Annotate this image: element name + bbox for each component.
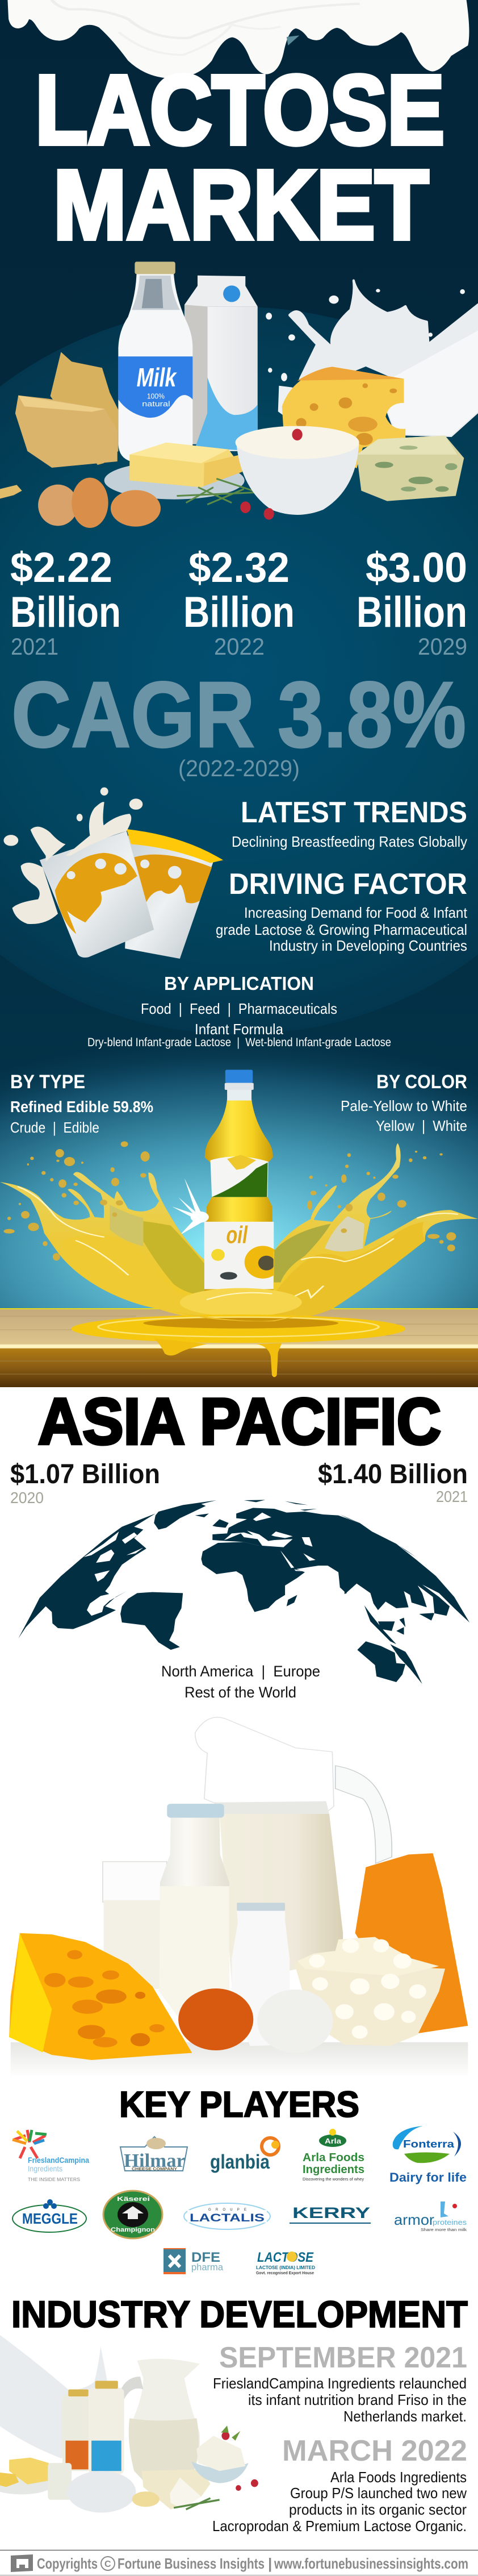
logo: Arla: Discovering the wonders of whey — [303, 2178, 364, 2182]
regional values: $1.07 Billion — [10, 1459, 160, 1489]
logo: Käserei Champignon: Champignon — [111, 2227, 155, 2233]
logo: glanbia: glanbia — [210, 2151, 270, 2173]
market size stats: $2.22 — [10, 544, 112, 591]
logo: DFE Pharma: DFE — [191, 2250, 220, 2265]
eurasia — [212, 1508, 469, 1622]
orange cheese — [355, 1853, 468, 2033]
logo: Fonterra — [389, 2126, 467, 2184]
glass — [48, 2463, 72, 2500]
logo: Arla: Ingredients — [303, 2163, 364, 2176]
logo: Lactalis — [184, 2203, 270, 2229]
glass of milk — [103, 1862, 167, 1989]
logo: Lactalis: GROUPE — [208, 2208, 246, 2212]
logo: Hilmar — [120, 2137, 187, 2171]
bowl of cottage cheese — [236, 426, 359, 519]
bottles — [62, 2381, 124, 2474]
dark header background — [0, 0, 478, 1466]
tall bottle — [159, 1804, 229, 2020]
logo: Käserei Champignon — [103, 2191, 162, 2238]
footer: | — [268, 2555, 272, 2572]
small bottle — [232, 1903, 290, 2046]
title: MARKET — [53, 149, 429, 260]
logo: Fonterra: Dairy for life — [389, 2170, 467, 2184]
oil bottle: oil — [226, 1221, 248, 1249]
milk bottle — [118, 262, 192, 461]
logo: Lactose India: LACTOSE — [257, 2250, 314, 2265]
logo: Käserei Champignon: Käserei — [117, 2196, 150, 2203]
market size stats: $3.00 — [366, 544, 467, 591]
driving factor: DRIVING FACTOR — [229, 868, 467, 901]
other regions: North America | Europe — [161, 1663, 320, 1680]
oil droplets — [3, 1141, 456, 1260]
other regions — [161, 1663, 320, 1701]
icon: Fortune Business Insights logo — [11, 2554, 33, 2572]
illustration: yogurt cups — [3, 788, 223, 959]
update: March 2022: MARCH 2022 — [282, 2434, 467, 2467]
market size stats: 2021 — [11, 633, 58, 660]
regional values — [10, 1459, 468, 1507]
market size stats: Billion — [10, 588, 121, 636]
logo: glanbia — [210, 2138, 279, 2173]
latest trends — [232, 796, 467, 850]
market size stats: Billion — [183, 588, 295, 636]
logo: Lactose India: LACTOSE (INDIA) LIMITED — [256, 2265, 315, 2270]
eggs — [38, 478, 161, 528]
milk bottle: 100% — [147, 392, 165, 401]
by application: BY APPLICATION — [164, 973, 314, 994]
logo: FrieslandCampina — [12, 2130, 89, 2182]
seas — [224, 1513, 316, 1571]
world map — [11, 1500, 469, 1684]
oil drips — [154, 1338, 282, 1377]
back cup — [125, 835, 213, 959]
butter on plate — [104, 443, 245, 500]
latest trends: LATEST TRENDS — [241, 796, 467, 829]
milk bottle: natural — [142, 399, 170, 408]
by application — [87, 973, 391, 1049]
logo: Lactose India: Govt. recognised Export House — [256, 2271, 314, 2275]
back faces — [131, 1220, 204, 1296]
front cup — [40, 831, 154, 958]
logo: Armor Proteines: armor — [394, 2211, 434, 2228]
milk drip along the top edge — [7, 0, 469, 78]
logo: Hilmar: CHEESE COMPANY — [132, 2167, 177, 2171]
by application: Dry-blend Infant-grade Lactose | Wet-blend Infant-grade Lactose — [87, 1036, 391, 1049]
by type: BY TYPE — [10, 1071, 85, 1093]
CAGR: (2022-2029) — [178, 755, 300, 781]
oil bottle — [204, 1069, 281, 1296]
update: March 2022 — [212, 2434, 467, 2535]
logo: Hilmar: Hilmar — [124, 2150, 185, 2171]
butter — [0, 2458, 52, 2494]
footer: Copyrights — [37, 2555, 98, 2572]
by application: Infant Formula — [195, 1021, 283, 1038]
logo: Arla: Arla — [325, 2137, 342, 2145]
south america — [120, 1592, 183, 1650]
blue cheese — [357, 436, 464, 501]
north america — [11, 1513, 156, 1665]
update: September 2021: SEPTEMBER 2021 — [219, 2341, 467, 2374]
update: March 2022: Arla Foods Ingredients — [330, 2469, 467, 2486]
swiss cheese wedge — [9, 1933, 192, 2060]
africa — [201, 1542, 305, 1612]
logo: Armor Proteines — [394, 2202, 467, 2232]
uk and islands — [212, 1519, 229, 1528]
by color: Pale-Yellow to White — [341, 1097, 467, 1114]
update: September 2021: Netherlands market. — [343, 2408, 467, 2425]
illustration: oil splash — [0, 1141, 478, 1377]
logo: DFE Pharma — [163, 2248, 224, 2274]
update: September 2021: its infant nutrition brand Friso in the — [248, 2391, 467, 2408]
logo: FrieslandCampina: THE INSIDE MATTERS — [28, 2177, 80, 2182]
brown egg — [178, 1988, 253, 2050]
footer: Fortune Business Insights — [118, 2555, 265, 2572]
regional values: 2021 — [436, 1488, 468, 1505]
starburst — [172, 1178, 209, 1235]
camembert — [132, 2469, 211, 2510]
white lower section background — [0, 1387, 478, 2576]
wooden table — [0, 1308, 478, 1387]
milk bottle: Milk — [137, 364, 177, 393]
reflection — [11, 2042, 468, 2078]
logo: Armor Proteines: Share more than milk — [421, 2228, 467, 2232]
regional values: $1.40 Billion — [318, 1459, 468, 1489]
update: March 2022: Group P/S launched two new — [290, 2485, 467, 2502]
centre pool — [180, 1288, 302, 1317]
illustration: dairy products — [0, 262, 478, 528]
driving factor: Industry in Developing Countries — [269, 937, 467, 954]
milk splash — [290, 281, 478, 436]
title — [35, 55, 445, 260]
cup lid — [127, 829, 223, 863]
market size stats — [10, 544, 467, 660]
photo: dairy products — [9, 1717, 468, 2078]
front faces — [61, 1235, 207, 1318]
swiss cheese — [282, 367, 405, 468]
splash silhouette — [0, 1143, 478, 1321]
logo: Arla: Arla Foods — [303, 2151, 364, 2164]
heading: Asia Pacific: ASIA PACIFIC — [38, 1385, 441, 1458]
greenland — [154, 1500, 216, 1530]
oil puddle — [72, 1314, 405, 1343]
illustration: dairy still life — [0, 2335, 258, 2512]
logo: DFE Pharma: pharma — [191, 2262, 224, 2273]
logo: Lactalis: LACTALIS — [190, 2212, 265, 2224]
footer: C — [104, 2560, 111, 2569]
other regions: Rest of the World — [185, 1684, 296, 1701]
logo: Arla — [303, 2129, 364, 2182]
hard cheese — [15, 352, 118, 468]
bowl of cottage cheese — [67, 2471, 136, 2512]
by color: BY COLOR — [376, 1071, 467, 1093]
north american lakes and arctic gaps — [84, 1532, 143, 1582]
whipped cream bowl — [191, 2425, 258, 2491]
update: March 2022: products in its organic sector — [289, 2501, 467, 2518]
market size stats: 2022 — [214, 633, 265, 660]
by type: Refined Edible 59.8% — [10, 1098, 153, 1116]
white egg — [257, 1990, 333, 2053]
milk carton — [185, 276, 258, 451]
by color — [341, 1071, 467, 1134]
jug — [119, 2359, 200, 2484]
jug — [195, 1717, 392, 1984]
update: September 2021 — [213, 2341, 467, 2425]
highlights — [18, 1187, 458, 1300]
logo: Armor Proteines: proteines — [433, 2218, 467, 2227]
logo: Fonterra: Fonterra — [403, 2138, 455, 2150]
bowl of cottage cheese — [294, 1937, 445, 2046]
by color: Yellow | White — [376, 1117, 467, 1134]
logo: Meggle — [12, 2199, 86, 2232]
milk splash — [3, 788, 142, 924]
logos: key players — [12, 2126, 467, 2275]
logo: Lactose India — [256, 2250, 315, 2275]
by type: Crude | Edible — [10, 1119, 99, 1136]
rosemary — [177, 478, 254, 505]
regional values: 2020 — [10, 1489, 44, 1507]
logo: FrieslandCampina: Ingredients — [28, 2164, 62, 2173]
logo: Meggle: MEGGLE — [22, 2210, 78, 2227]
cheese crumb — [0, 485, 22, 498]
logo: Kerry: KERRY — [292, 2204, 370, 2221]
logo: FrieslandCampina: FrieslandCampina — [28, 2155, 89, 2165]
rosemary — [174, 2498, 220, 2510]
driving factor — [216, 868, 468, 954]
market size stats: 2029 — [418, 633, 467, 660]
by application: Food | Feed | Pharmaceuticals — [141, 1000, 337, 1017]
footer — [0, 2550, 478, 2575]
australia — [357, 1641, 405, 1682]
by type — [10, 1071, 153, 1136]
milk swoosh — [0, 2335, 113, 2458]
heading: key players: KEY PLAYERS — [119, 2084, 359, 2125]
market size stats: $2.32 — [188, 544, 290, 591]
